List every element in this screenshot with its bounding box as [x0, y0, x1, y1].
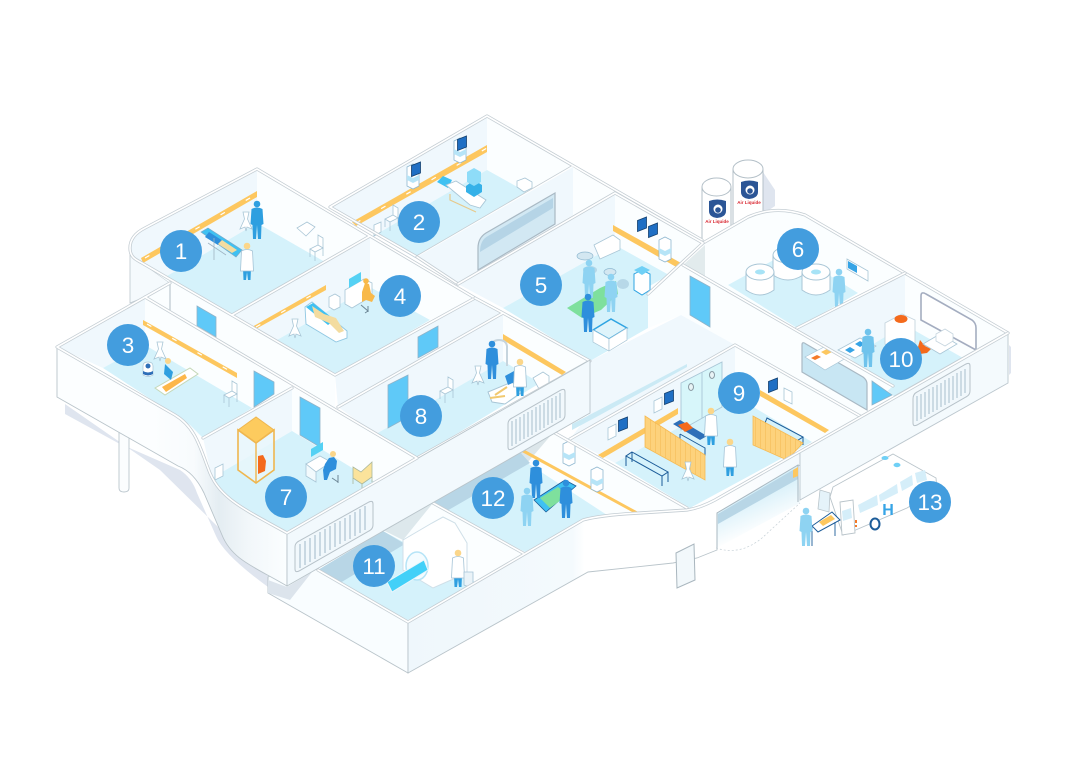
grey wedge: [383, 503, 433, 540]
number badge 1: [160, 230, 202, 272]
wall: lower right face: [408, 452, 800, 673]
stand: room 9: [682, 462, 694, 481]
wall: room 3 left: [57, 297, 145, 368]
number badge 12: [472, 477, 514, 519]
table shadow: [583, 266, 629, 289]
MRI bore: [406, 552, 428, 580]
wall tops: room 5: [458, 193, 703, 294]
number badge 9: 9: [733, 381, 745, 406]
wing shadow on lower wall: [268, 572, 312, 600]
floor shadow: room 11: [318, 531, 405, 583]
shadow: right wall: [1009, 345, 1011, 375]
wall: room 7 right: [292, 387, 417, 482]
stand: room 8: [472, 366, 484, 385]
wall: room 8 right: [503, 313, 590, 383]
instrument table: [593, 319, 627, 351]
surgeon: right: [604, 274, 618, 312]
support column: [119, 430, 129, 492]
floor sliver: [572, 364, 687, 430]
chair: room 8: [440, 377, 453, 403]
floor: room 4: [277, 287, 430, 375]
doctor: room 1 scrub: [250, 201, 264, 239]
number badge 5: [520, 264, 562, 306]
ambulance rear window: [842, 508, 852, 521]
wall panel: room 7: [215, 464, 223, 480]
window: room 10: [921, 293, 976, 350]
enclosed cabinet: [238, 417, 274, 483]
wall: room 10: [797, 273, 1008, 397]
stripe: room 5: [613, 225, 681, 268]
surgeon: back: [582, 260, 596, 298]
drum: back: [773, 247, 803, 280]
cart: room 2 left: [407, 164, 419, 189]
wedge wall: [683, 245, 705, 283]
doctor: room 1 coat: [240, 243, 254, 280]
number badge 10: 10: [888, 347, 914, 372]
number badge 6: 6: [792, 237, 804, 262]
wall tops: corridor: [417, 193, 615, 284]
wall: room 12 back: [512, 433, 687, 515]
floor: room 6: [728, 251, 858, 328]
ambulance scene: [800, 454, 937, 546]
door: small: [872, 381, 892, 405]
number badge 12: 12: [480, 486, 506, 511]
wall: corridor right: [573, 167, 615, 215]
wall with door and inspection window: [648, 210, 1008, 416]
patient stretcher: [673, 420, 707, 456]
stripe: room 2: [352, 145, 487, 226]
floor: room 7: [212, 431, 375, 533]
garage opening: [716, 465, 800, 550]
wall: room 11 back: [383, 503, 523, 583]
wall: room 2 back left: [330, 116, 487, 258]
wall: room 4 right: [370, 236, 475, 320]
floor: room 5: [503, 245, 669, 361]
stripe marks: room 2: [356, 148, 487, 223]
wall: room 6: [703, 210, 905, 328]
number badge 8: 8: [415, 404, 427, 429]
number badge 4: [379, 275, 421, 317]
storage tank with orange top: [885, 314, 915, 352]
bed: room 9 right: [765, 418, 803, 450]
wall panel: room 6: [847, 259, 868, 281]
wall: room 1 front: [142, 263, 335, 410]
door: [690, 276, 710, 327]
number badge 7: [265, 476, 307, 518]
anesthesia machine: [466, 168, 482, 197]
orange device: [918, 340, 931, 354]
ambulance marks: [855, 520, 857, 527]
wall tops: wing: [57, 283, 417, 533]
staff: room 12 light: [520, 488, 534, 526]
wedge shadow: room 12: [513, 434, 552, 462]
room 12: [433, 433, 687, 552]
stripe marks: room 4: [256, 287, 326, 327]
wall: room 1 outer curve: [130, 248, 170, 303]
glass window: [478, 193, 555, 270]
person: room 10: [862, 329, 874, 367]
room 10: [797, 273, 1008, 397]
room 9: [570, 345, 860, 508]
cart: room 5: [659, 237, 671, 262]
cart: room 2 right: [454, 138, 466, 163]
cabinet: room 2: [374, 222, 381, 236]
number badge 11: 11: [362, 554, 386, 579]
seated operator: [361, 278, 375, 313]
floor: room 8: [376, 361, 540, 458]
bed with patient: room 3: [155, 358, 198, 395]
ambulance open door: [818, 490, 830, 512]
wall face: room 4 to room 8: [335, 298, 503, 407]
machine: room 5: [634, 266, 650, 295]
robot: room 3: [143, 362, 153, 376]
desk: room 4: [345, 272, 372, 308]
bed: room 9 left: [626, 452, 668, 486]
number badge 2: [398, 201, 440, 243]
double doors: [681, 362, 722, 430]
number badge 8: [400, 395, 442, 437]
vent: room 7 side: [295, 501, 373, 572]
door: room 1: [197, 306, 216, 337]
stripe: room 9 right: [760, 390, 829, 433]
number badge 13: [909, 481, 951, 523]
wall: wing right front: [287, 360, 590, 586]
stripe: room 1: [141, 191, 257, 263]
room 5: [458, 193, 703, 361]
door: room 8: [388, 375, 408, 428]
garage awning edge: [793, 467, 798, 478]
yellow chair: [353, 462, 372, 490]
wall tops: room 6 and 10: [683, 210, 1008, 397]
operating bed: room 12: [534, 480, 576, 512]
door: room 3: [254, 371, 274, 407]
curtain: left: [645, 416, 705, 480]
screens: room 5: [638, 217, 658, 238]
drum: left: [746, 264, 774, 295]
lower level outer wall: [268, 452, 800, 673]
operator: [452, 550, 473, 587]
desk and screen: room 7: [306, 442, 331, 482]
seated operator: room 7: [323, 451, 338, 483]
building shadow: [65, 404, 268, 587]
number badge 6: [777, 228, 819, 270]
wall tops: room 8: [338, 298, 590, 458]
wall: corridor left: [417, 167, 573, 284]
wall: room 1 right: [257, 169, 370, 262]
floor: room 12: [433, 453, 607, 552]
ambulance body: [830, 454, 937, 535]
wall: room 1 left: [130, 169, 257, 276]
doctor: room 9 front: [724, 439, 736, 476]
doctor: room 9 back: [704, 408, 718, 445]
room 1: [130, 169, 370, 410]
staff: room 12 left: [530, 460, 542, 498]
door: room 7: [300, 397, 320, 447]
wall: room 2 back right: [487, 116, 573, 215]
room 4: [130, 169, 503, 407]
MRI body: [403, 517, 467, 588]
number badge 10: [880, 338, 922, 380]
corridor behind room 5: [417, 167, 615, 284]
wall: wing left front: [57, 347, 287, 586]
room 3 and room 7 wing: [57, 283, 590, 586]
wall: room 3 right: [145, 297, 292, 438]
wall tops: room 9: [570, 345, 860, 439]
staff: room 8: [486, 341, 498, 379]
chair: room 1: [310, 235, 323, 261]
wall tops: room 2: [330, 116, 702, 257]
patient bed: [201, 228, 242, 260]
ambulance lights: [882, 456, 900, 467]
stripe: room 4: [252, 285, 326, 330]
number badge 7: 7: [280, 485, 292, 510]
wall: room 4 left: [232, 236, 370, 340]
stand: room 3: [154, 342, 166, 361]
number badge 11: [353, 545, 395, 587]
room 11: [318, 333, 1008, 622]
wall: divider: [169, 283, 171, 312]
drum: right: [802, 264, 830, 295]
chair: room 2: [385, 205, 398, 231]
tank: front: Air Liquide: [705, 219, 729, 224]
chair: room 3: [224, 381, 237, 407]
stretcher: [812, 512, 840, 546]
inspection window: [802, 343, 867, 410]
wall units: room 9: [608, 378, 792, 440]
screen: room 2 left: [412, 162, 420, 176]
gynecology chair: [488, 371, 522, 404]
lower wall behind room 9: [570, 315, 735, 439]
curtain: right: [753, 416, 803, 460]
number badge 2: 2: [413, 210, 425, 235]
ambulance wheel: [870, 518, 880, 530]
staff: room 12 right: [560, 480, 572, 518]
MRI table: [387, 560, 428, 592]
room 8: [338, 298, 590, 458]
reclining chair: [305, 302, 347, 342]
wall: room 8 left: [338, 313, 503, 434]
stripe: room 3: [143, 320, 237, 378]
MRI scanner: [387, 517, 467, 592]
stripe: room 9 left: [598, 408, 678, 458]
wall: right face: [800, 333, 1008, 500]
wall: room 7 left: [203, 387, 292, 478]
cabinet: room 5: [594, 235, 620, 259]
wall: room 5 back left: [458, 193, 615, 308]
ambulance windows: [858, 470, 927, 513]
floor: room 10: [850, 325, 963, 397]
monitor stand: [329, 294, 340, 310]
floor: room 11: [318, 531, 477, 620]
stripe: room 12: [522, 449, 640, 513]
oxygen tanks: [702, 160, 775, 245]
screen: room 2 right: [458, 136, 466, 150]
number badge 5: 5: [535, 273, 547, 298]
number badge 13: 13: [917, 490, 943, 515]
room 2: [330, 116, 702, 258]
IV stand: room 1: [240, 212, 252, 231]
wall: lower left face: [268, 560, 408, 673]
doctor: room 8: [514, 359, 526, 396]
stripe marks: room 3: [147, 324, 237, 375]
floor: room 2: [377, 170, 530, 258]
tank: rear: Air Liquide: [737, 200, 761, 205]
ambulance H: H: [882, 502, 894, 519]
stripe marks: room 1: [145, 194, 257, 258]
vent: room 10 side: [913, 363, 970, 426]
person: room 6: [832, 269, 846, 307]
right outer wall: [800, 333, 1011, 500]
surgical lamps: [577, 252, 616, 276]
cabinet: room 8: [533, 372, 549, 389]
wall face: [648, 265, 893, 416]
shadow: tanks: [763, 172, 775, 214]
wall tops: room 11: [318, 333, 1008, 622]
number badge 3: 3: [122, 333, 134, 358]
wall box: room 12: [563, 441, 575, 466]
paramedic: [800, 508, 812, 546]
floor: room 1: [167, 223, 325, 315]
surgeon: front: [582, 294, 594, 332]
entrance door: [676, 544, 695, 588]
tanks: room 6: [746, 247, 830, 295]
number badge 4: 4: [394, 284, 406, 309]
blue devices: [845, 341, 865, 353]
ambulance rear door: [840, 500, 855, 535]
treatment bed: [437, 176, 486, 212]
wall tops: room 1 and 4: [130, 169, 475, 375]
workbench: [838, 338, 876, 358]
wall: room 9 right: [735, 345, 860, 442]
number badge 9: [718, 372, 760, 414]
operating table: [567, 281, 618, 318]
floor: room 3: [103, 345, 252, 438]
number badge 3: [107, 324, 149, 366]
floor: room 9: [615, 396, 812, 508]
wall: room 5 back right: [615, 193, 703, 328]
stand: room 4: [289, 319, 301, 338]
room 6: [683, 210, 905, 328]
floor shadow: room 12: [433, 452, 530, 512]
cart: room 12: [591, 467, 603, 492]
sink: room 2: [517, 178, 532, 192]
sink: room 1: [297, 222, 315, 236]
door: room 4: [418, 326, 438, 358]
number badge 1: 1: [175, 239, 187, 264]
lab table: [923, 329, 957, 354]
stripe: room 8: [503, 334, 566, 375]
vent: room 8 side: [508, 389, 565, 450]
wall: room 9 left: [570, 345, 735, 463]
round lamp: [492, 340, 507, 366]
wall: room 10 right: [905, 273, 1008, 358]
wall tops: room 12: [555, 433, 687, 508]
